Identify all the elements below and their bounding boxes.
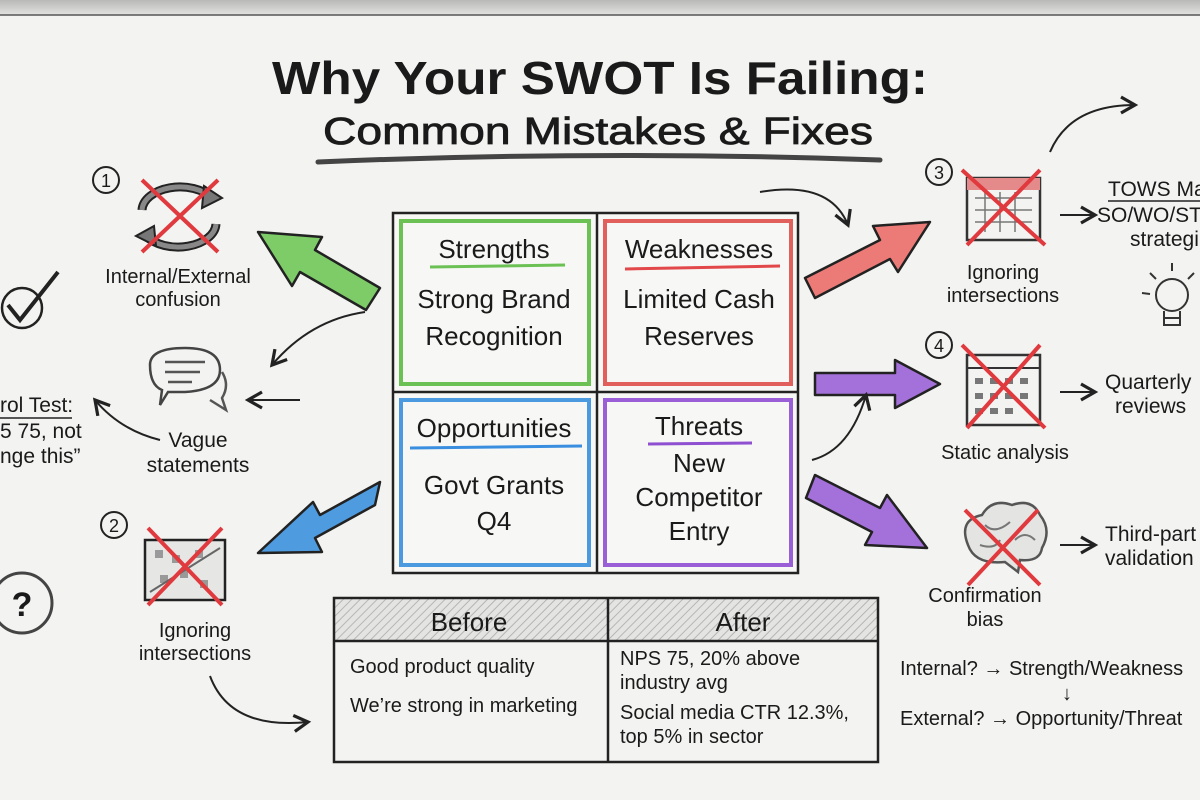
title: Why Your SWOT Is Failing:: [272, 52, 928, 104]
fix: TOWS matrix: strategi: [1130, 228, 1199, 251]
fix: TOWS matrix: SO/WO/ST: [1097, 204, 1200, 227]
decision guide: External? → Opportunity/Threat: [900, 708, 1183, 730]
quadrant: weaknesses: Weaknesses: [625, 234, 773, 264]
mistake 3: ignoring intersections: [926, 159, 1059, 307]
mistake: vague statements: Vague: [168, 429, 228, 452]
mistake 4: static analysis: [926, 332, 1069, 464]
quadrant: strengths: Strengths: [438, 234, 550, 264]
mistake 1: internal/external confusion: 1: [101, 171, 111, 191]
title: Common Mistakes & Fixes: [323, 111, 873, 153]
title underline: [318, 155, 880, 162]
mistake: vague statements: statements: [147, 454, 249, 477]
quadrant: weaknesses: Reserves: [644, 321, 754, 351]
fix: third-party validation: [1105, 523, 1196, 570]
mistake 2: ignoring intersections: intersections: [139, 643, 251, 665]
icon: checkmark: [2, 272, 58, 328]
fix: TOWS matrix: [1097, 178, 1200, 251]
quadrant: strengths: Strong Brand: [417, 284, 571, 314]
before/after table: NPS 75, 20% above: [620, 648, 800, 670]
small curved arrows: [95, 105, 1135, 723]
quadrant: opportunities: Q4: [477, 506, 511, 536]
quadrant: threats: Competitor: [635, 482, 763, 512]
icon: question mark: [0, 573, 52, 633]
before/after table: Good product quality: [350, 656, 535, 678]
mistake 1: internal/external confusion: Internal/External: [105, 266, 251, 288]
SWOT grid: [393, 213, 798, 573]
fix: quarterly reviews: Quarterly: [1105, 371, 1192, 394]
quadrant: weaknesses: Limited Cash: [623, 284, 775, 314]
fix: quarterly reviews: [1105, 371, 1192, 418]
control test note: 5 75, not: [0, 420, 82, 443]
mistake 2: ignoring intersections: Ignoring: [159, 620, 231, 642]
before/after table: top 5% in sector: [620, 726, 764, 748]
quadrant: threats: [605, 400, 791, 565]
mistake 5: confirmation bias: Confirmation: [928, 585, 1042, 607]
arrow: purple to mistake 5: [806, 475, 927, 548]
mistake 1: internal/external confusion: [93, 167, 251, 311]
decision guide: [900, 658, 1183, 730]
mistake 4: static analysis: Static analysis: [941, 442, 1069, 464]
quadrant: strengths: [401, 221, 589, 384]
quadrant: weaknesses: [605, 221, 791, 384]
mistake: vague statements: [147, 348, 249, 477]
quadrant: opportunities: Opportunities: [417, 413, 571, 443]
fix: quarterly reviews: reviews: [1115, 395, 1186, 418]
before/after table: [334, 598, 878, 762]
mistake 3: ignoring intersections: intersections: [947, 285, 1059, 307]
control test note: rol Test:: [0, 394, 73, 417]
quadrant: threats: Threats: [655, 411, 743, 441]
mistake 2: ignoring intersections: [101, 512, 251, 665]
title: [272, 52, 928, 153]
before/after table: We’re strong in marketing: [350, 695, 578, 717]
quadrant: threats: Entry: [669, 516, 729, 546]
quadrant: opportunities: [401, 400, 589, 565]
fix: third-party validation: Third-part: [1105, 523, 1196, 546]
mistake 5: confirmation bias: [928, 503, 1047, 631]
arrow: blue to mistake 2: [258, 482, 380, 553]
mistake 3: ignoring intersections: Ignoring: [967, 262, 1039, 284]
fix: third-party validation: validation: [1105, 547, 1194, 570]
before/after table: Social media CTR 12.3%,: [620, 702, 849, 724]
before/after table: industry avg: [620, 672, 728, 694]
mistake 2: ignoring intersections: 2: [109, 516, 119, 536]
mistake 1: internal/external confusion: confusion: [135, 289, 221, 311]
decision guide: ↓: [1062, 683, 1072, 705]
icon: light bulb: [1142, 263, 1194, 325]
decision guide: Internal? → Strength/Weakness: [900, 658, 1183, 680]
before/after table: Before: [431, 607, 507, 637]
arrow: green to mistake 1: [258, 232, 380, 310]
mistake 5: confirmation bias: bias: [967, 609, 1003, 631]
mistake 4: static analysis: 4: [934, 336, 944, 356]
arrow: red to mistake 3: [805, 222, 930, 298]
quadrant: threats: New: [673, 448, 725, 478]
before/after table: After: [716, 607, 771, 637]
control test note: nge this”: [0, 445, 81, 468]
quadrant: opportunities: Govt Grants: [424, 470, 564, 500]
arrow: purple to mistake 4: [815, 360, 940, 408]
icon: question mark: ?: [12, 586, 32, 624]
control test note: [0, 394, 82, 468]
mistake 3: ignoring intersections: 3: [934, 163, 944, 183]
quadrant: strengths: Recognition: [425, 321, 563, 351]
